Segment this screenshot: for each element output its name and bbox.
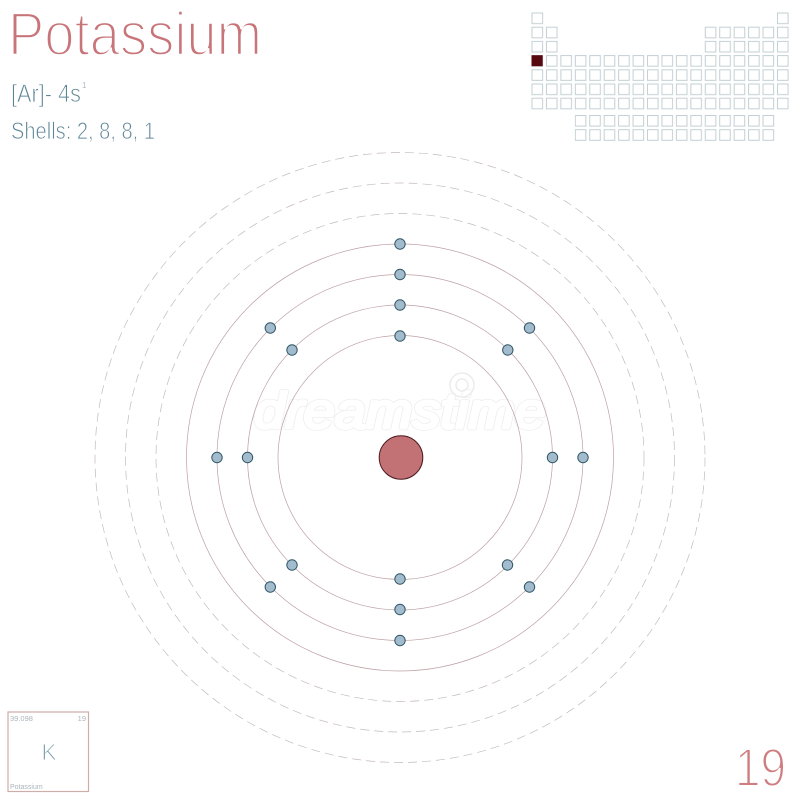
watermark: dreamstime: [254, 383, 546, 439]
element card: [8, 712, 88, 792]
title: Potassium: [8, 0, 262, 68]
highlighted element: potassium: [532, 55, 543, 66]
occupied electron shells: [186, 244, 614, 671]
empty outer shells: [95, 152, 705, 762]
shell counts: Shells: 2, 8, 8, 1: [11, 118, 155, 145]
element name: Potassium: [10, 784, 43, 791]
electrons: [212, 239, 588, 646]
atomic number: 19: [735, 738, 786, 798]
atomic mass: 39.098: [10, 714, 33, 723]
electron configuration: [Ar]- 4s: [11, 80, 81, 108]
element symbol: K: [41, 739, 57, 765]
periodic table locator: [531, 12, 790, 142]
electron configuration: 1: [82, 81, 87, 90]
atomic number small: 19: [78, 714, 86, 723]
nucleus: [379, 436, 423, 479]
watermark: dreamstime: [254, 383, 546, 439]
